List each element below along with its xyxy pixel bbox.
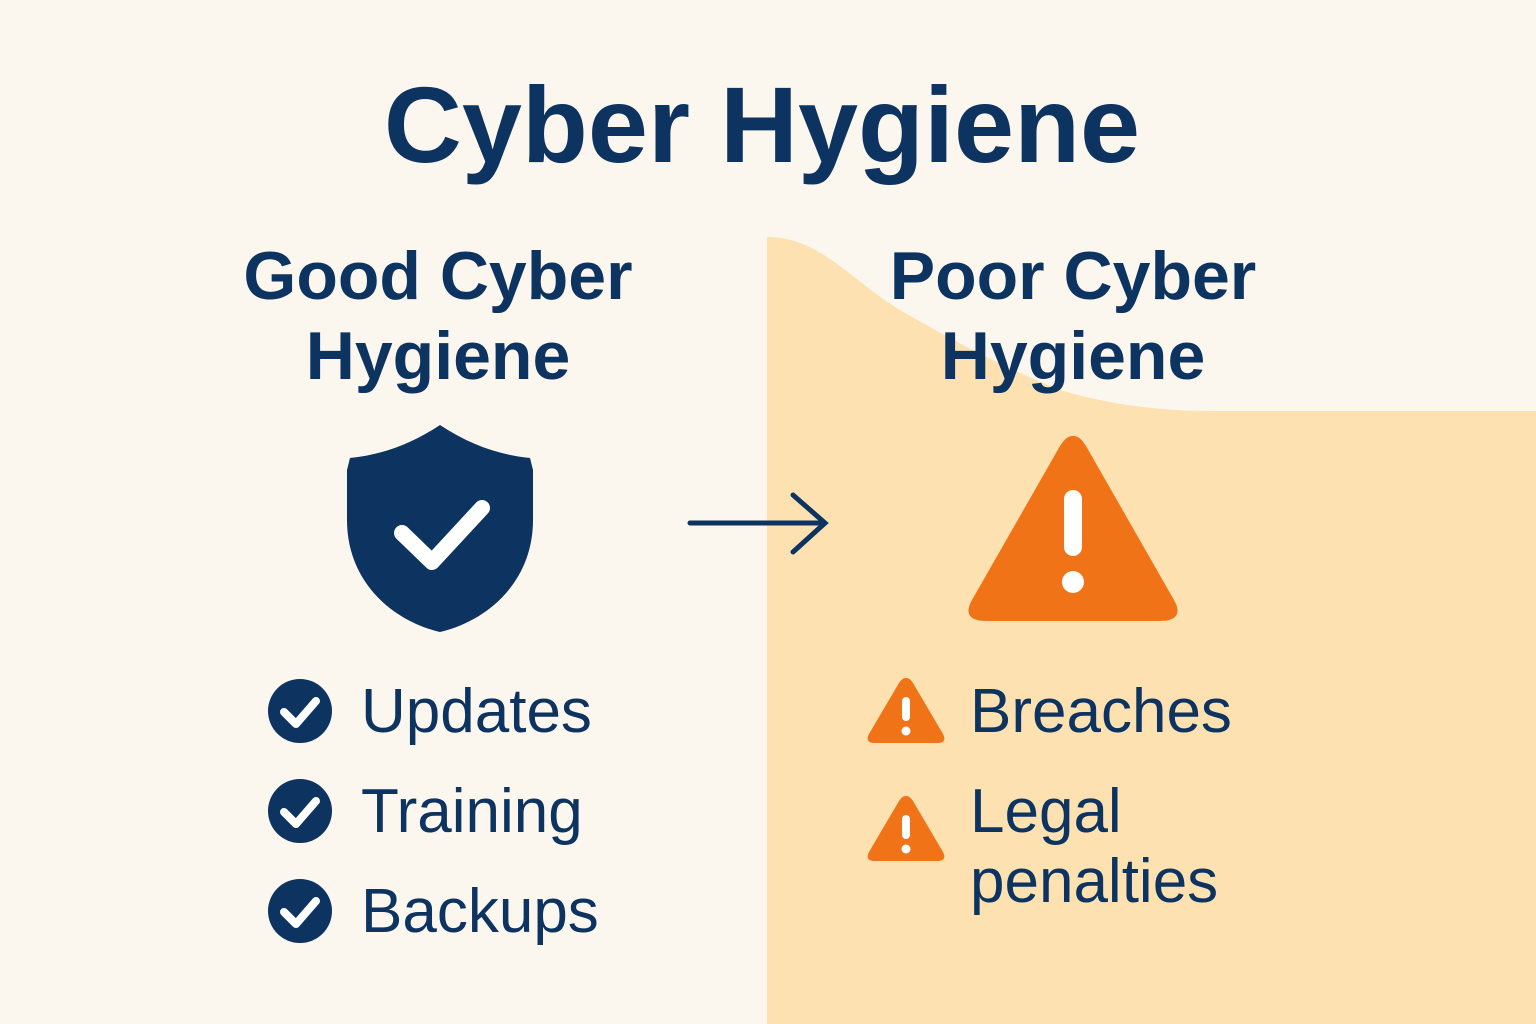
item: legal penalties: Legal	[970, 777, 1122, 846]
heading: good cyber hygiene: Hygiene	[306, 318, 570, 394]
heading: good cyber hygiene: Good Cyber	[243, 238, 633, 314]
item: updates: Updates	[361, 677, 592, 746]
arrow	[688, 492, 829, 554]
icon: shield with check	[347, 425, 533, 632]
item: legal penalties	[868, 777, 1218, 916]
title: Cyber Hygiene	[384, 64, 1140, 185]
heading: poor cyber hygiene: Hygiene	[941, 318, 1205, 394]
item: training: Training	[361, 777, 583, 846]
icon: warning triangle	[968, 436, 1178, 621]
heading: poor cyber hygiene: Poor Cyber	[890, 238, 1256, 314]
item: breaches: Breaches	[970, 677, 1232, 746]
item: backups: Backups	[361, 877, 599, 946]
list: poor consequences	[868, 677, 1232, 916]
list: good practices	[268, 677, 599, 946]
heading: poor cyber hygiene	[890, 238, 1256, 394]
heading: good cyber hygiene	[243, 238, 633, 394]
item: legal penalties: penalties	[970, 847, 1218, 916]
